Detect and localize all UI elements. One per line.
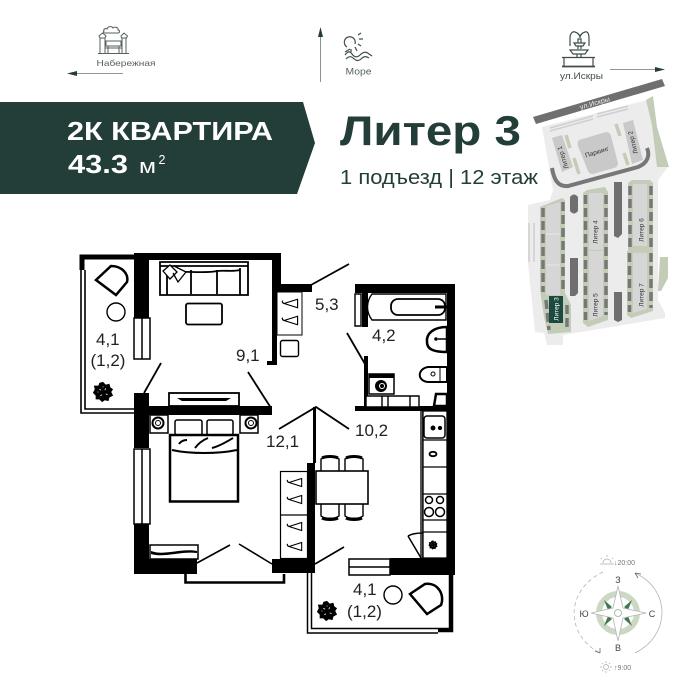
building: Литер 1: Литер 1 [557,145,571,170]
area labels: 4,1 [96,330,120,349]
window: kitchen [349,559,390,575]
sunset time: ↓20:00 [614,560,635,567]
building: Литер 2: Литер 2 [627,130,640,155]
kitchen appliance icon [428,540,438,550]
direction letters [579,575,656,653]
site plan [528,79,669,345]
building: Литер 4 [583,187,608,327]
subheading: entrance and floor: 1 подъезд | 12 этаж [340,167,539,189]
building: Литер 5: Литер 5 [592,293,600,317]
sink [427,327,447,352]
toilet [420,367,447,382]
green strip [646,96,669,291]
area value: 43.3 [68,151,128,179]
kitchen tap [430,452,436,456]
driveway [552,148,648,186]
icon: sun and waves [344,33,372,61]
area labels: 10,2 [355,421,388,440]
greenery patches [566,124,628,174]
direction letters: З [615,575,621,585]
compass ring [599,594,637,632]
area unit: м [139,156,156,178]
washing machine [369,374,394,394]
wardrobe: bedroom [280,472,308,558]
balcony chair [410,584,442,614]
building: Литер 6: Литер 6 [638,218,646,242]
building: Литер 4: Литер 4 [592,220,600,244]
wall: wardrobe header [281,284,312,292]
direction letters: В [615,643,621,653]
label: Набережная: Набережная [96,58,156,68]
arrow: left [67,71,123,76]
doors: bedroom balcony [197,544,272,564]
area labels: (1,2) [90,351,125,370]
heading: Литер 3: Литер 3 [340,107,521,154]
building: Литер 5 [589,251,603,321]
street: ул.Искры [579,96,611,111]
area labels: (1,2) [347,602,382,621]
direction letters: С [649,609,656,619]
building: Литер 7 [627,251,653,318]
kitchen sink [424,416,445,438]
roads between buildings [570,182,622,322]
bathroom cabinets [366,396,419,407]
direction: Море [318,27,372,82]
dresser [150,545,198,559]
green needles [604,600,632,626]
balcony chair [96,266,127,295]
walls [134,253,455,575]
hob [424,496,444,516]
banner [0,102,315,194]
balcony table [384,586,402,604]
balcony table [107,303,125,321]
parking [578,132,618,174]
sofa [160,262,248,295]
kitchen counter [408,411,447,558]
window: living room [134,318,150,359]
kitchen partition [420,411,423,558]
tv unit [169,393,239,406]
hall pouf [280,340,298,356]
bay window [186,574,284,582]
label: Море: Море [346,66,372,76]
building: Литер 1 [552,135,573,172]
icon: fountain [562,32,595,66]
parking: Паркинг [584,145,610,159]
kitchen door [408,533,423,558]
plant [93,382,113,402]
direction: ул.Искры [560,32,665,82]
doors: hall to kitchen and bedroom [279,407,349,429]
door: kitchen balcony [315,547,344,564]
arrow: right [610,67,665,72]
area labels: 12,1 [266,432,299,451]
building: Литер 2 [623,120,643,164]
building: Литер 3 highlighted: Литер 3 [554,297,560,321]
area labels: 4,2 [372,326,396,345]
doors: living room [144,363,271,408]
coffee table [186,304,222,324]
banner shape [0,102,315,194]
bed [170,420,238,502]
dining table [316,456,368,520]
door: bathroom [347,333,365,364]
balcony: living room [81,257,134,413]
sun path arcs [574,572,662,653]
sunrise time: ↑9:00 [614,665,631,672]
nightstands and lamps [150,415,258,433]
building: Литер 6 [628,180,653,252]
label: ул.Искры: ул.Искры [560,71,603,82]
balcony: kitchen [308,573,451,633]
area labels: 4,1 [353,580,377,599]
window: bedroom [134,449,150,524]
direction letters: Ю [579,609,589,619]
arrow: up [318,27,323,82]
direction: Набережная [67,27,156,76]
site ground [528,100,668,345]
icon: embankment bench [98,27,129,54]
area labels [90,295,396,621]
building: Литер 3 highlighted [540,198,571,334]
bathtub [355,294,447,326]
floor plan [81,253,455,633]
bathroom shelf [434,394,447,406]
door: wardrobe [311,264,349,285]
street [533,79,665,124]
heading: apartment type: 2К КВАРТИРА [67,118,273,146]
compass [574,555,662,673]
area labels: 5,3 [315,295,339,314]
area unit exponent: 2 [158,153,166,167]
area labels: 9,1 [236,346,260,365]
parking rows [529,106,628,262]
building: Литер 7: Литер 7 [638,283,646,307]
plant [317,601,337,621]
compass star [591,586,646,641]
wardrobe: hall [277,292,302,335]
partition at bedroom and kitchen [313,407,316,463]
